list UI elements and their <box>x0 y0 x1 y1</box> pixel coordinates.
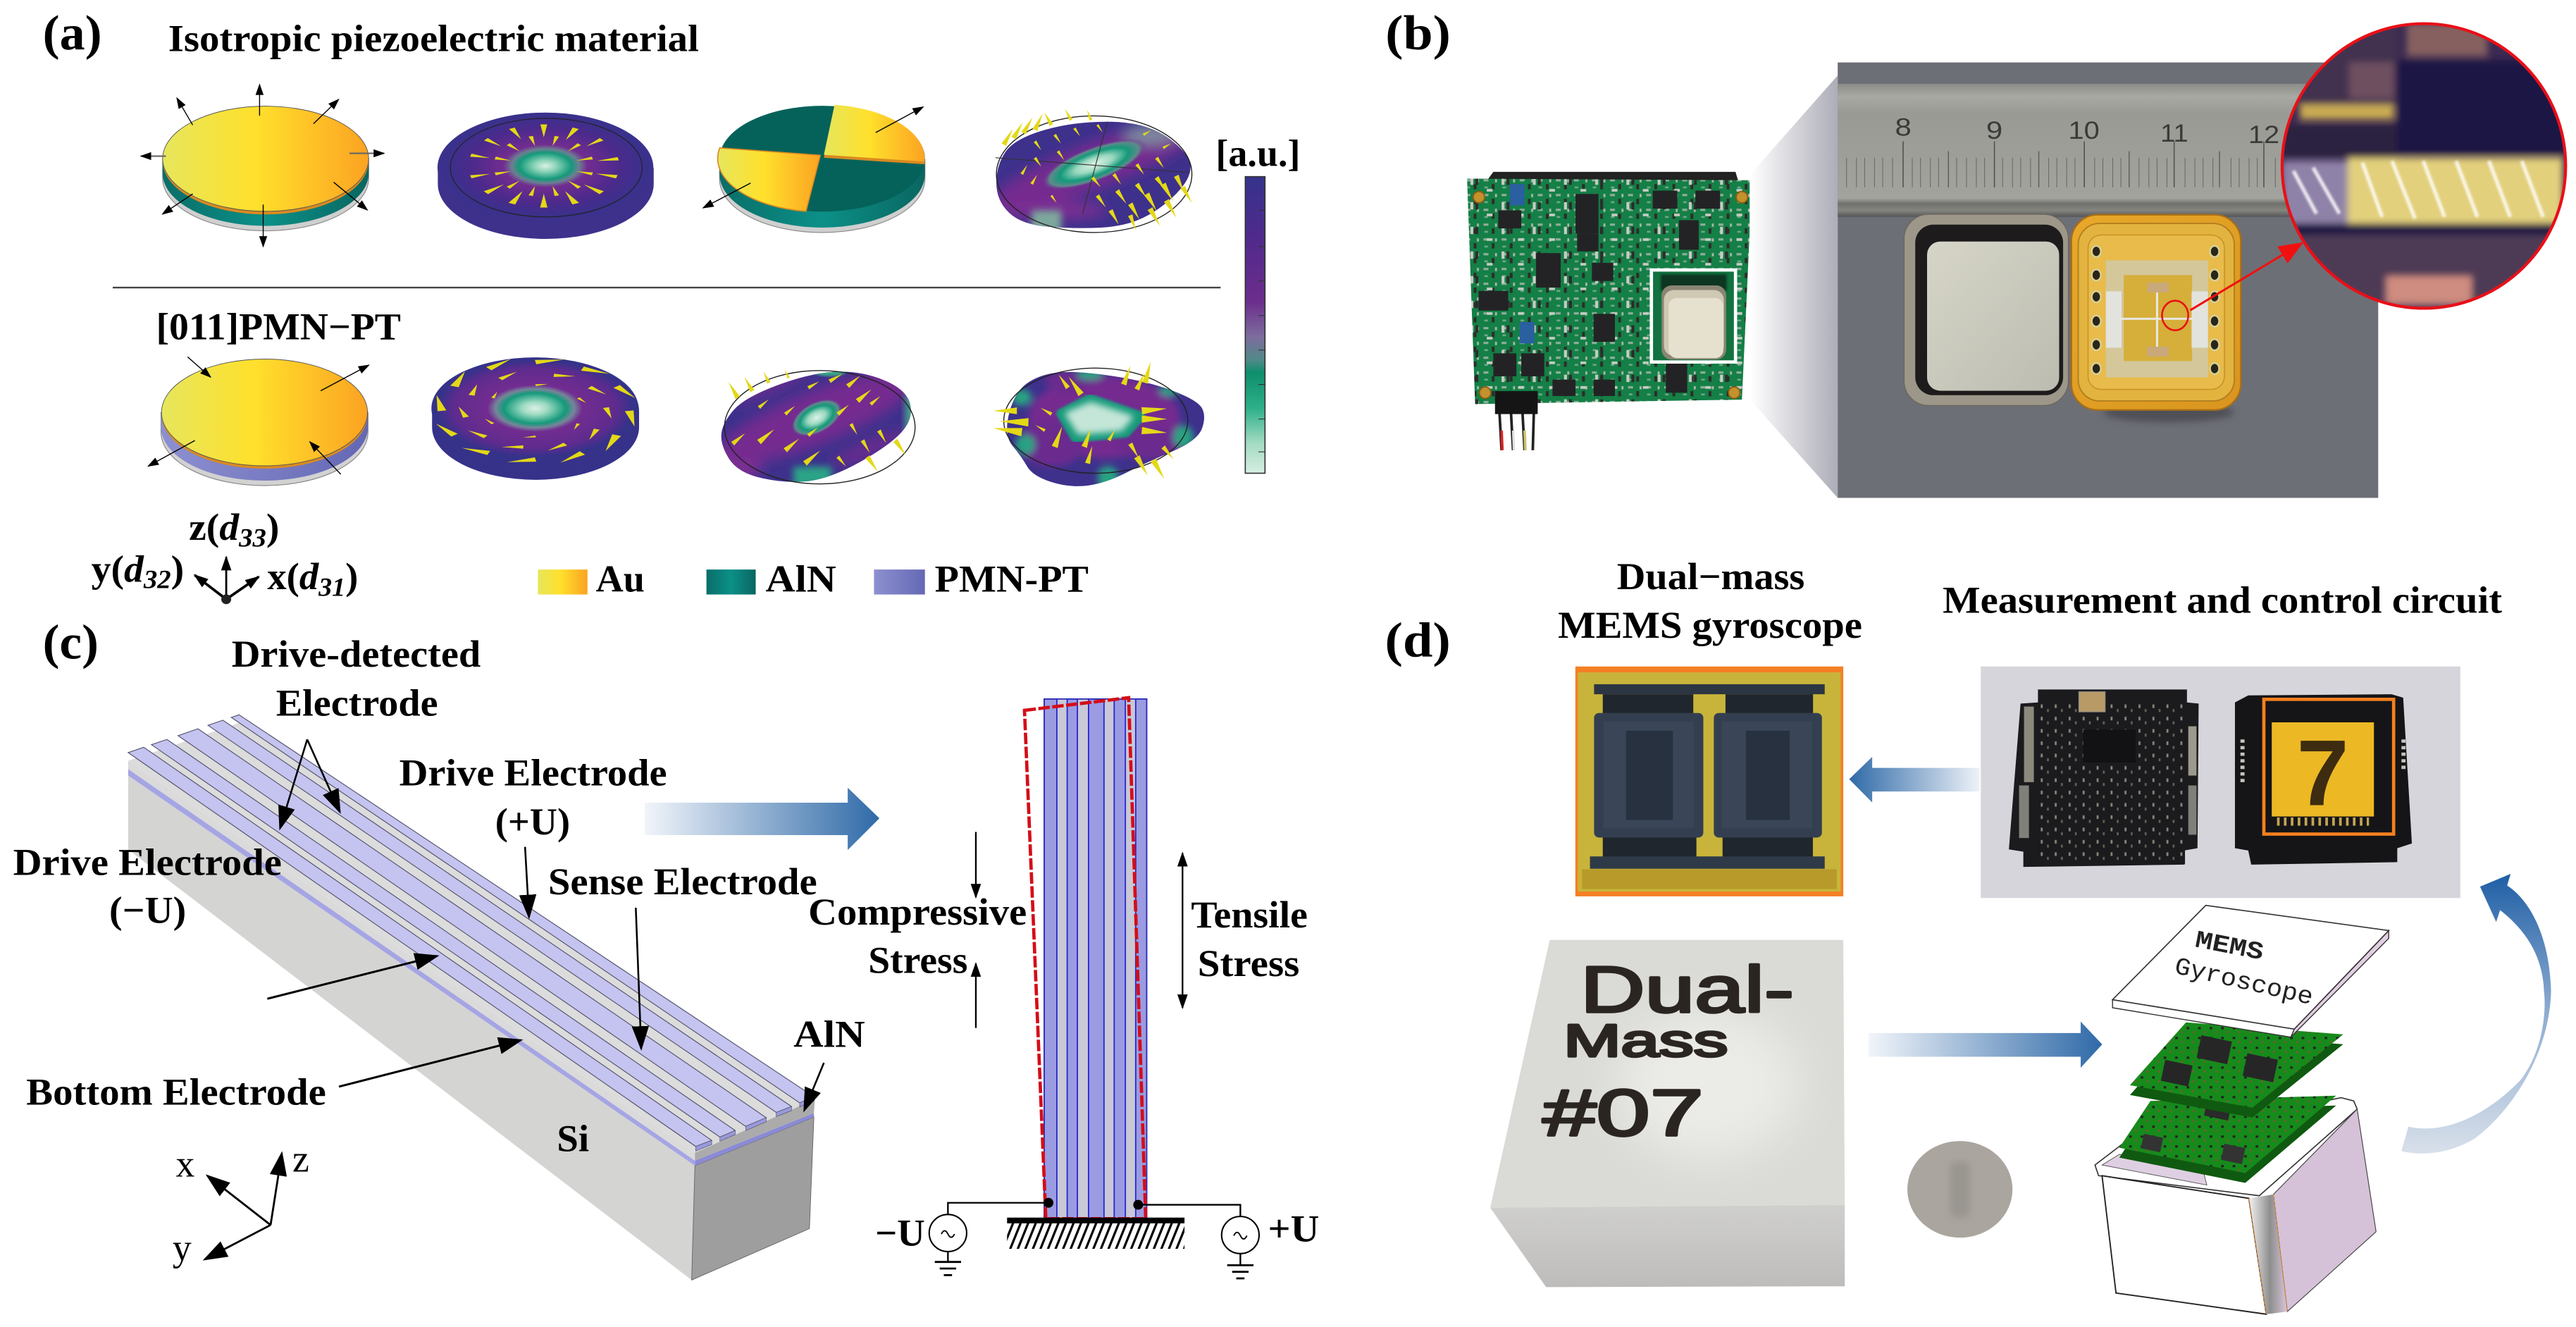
arrow: blue flow right to assembly <box>1869 1022 2103 1068</box>
arrow: blue flow right <box>645 788 879 850</box>
axis triad with d33 d32 d31 labels: ) <box>345 555 358 598</box>
heading: dual-mass gyroscope: MEMS gyroscope <box>1558 604 1862 646</box>
disc 2: breathing mode field <box>438 113 654 239</box>
panel a: piezoelectric vibration modes <box>43 6 1300 604</box>
ruler <box>1838 84 2306 217</box>
axis triad with d33 d32 d31 labels: 31 <box>318 573 345 602</box>
beam: silicon with AlN and electrodes <box>128 715 815 1280</box>
legend: materials: Au <box>596 557 645 600</box>
open lid <box>1904 214 2069 405</box>
compressive stress label and arrows <box>808 832 1027 1028</box>
axis triad with d33 d32 d31 labels: ) <box>266 506 279 548</box>
tensile stress label and arrow <box>1182 853 1308 1008</box>
voltage source +U <box>1133 1200 1319 1278</box>
label: drive-detected electrode: Electrode <box>276 681 438 724</box>
heading: measurement circuit: Measurement and control circuit <box>1943 579 2502 622</box>
label: drive electrode -U <box>13 841 437 999</box>
label: bottom electrode: Bottom Electrode <box>26 1071 326 1113</box>
photo: aluminium block with handwriting: #07 <box>1542 1076 1704 1149</box>
ruler: 8 <box>1895 114 1912 142</box>
label: AlN <box>793 1013 865 1110</box>
label: AlN: AlN <box>793 1013 865 1055</box>
lid with MEMS Gyroscope engraving: MEMS <box>2193 927 2266 968</box>
green circuit board <box>1467 172 1752 450</box>
panel b: packaged gyroscope photos <box>1385 6 2566 498</box>
tensile stress label and arrow: Stress <box>1198 942 1299 985</box>
xyz axes <box>173 1137 309 1269</box>
disc 7: deformed mode field <box>722 369 916 485</box>
magnified wire bonds circle <box>2282 23 2566 309</box>
heading: dual-mass gyroscope: Dual−mass <box>1617 555 1804 598</box>
lower PCB <box>2119 1096 2336 1183</box>
compressive stress label and arrows: Stress <box>868 939 967 981</box>
curved arrow back to circuit <box>2401 874 2551 1154</box>
axis triad with d33 d32 d31 labels: x(d <box>267 555 318 598</box>
voltage source +U: +U <box>1268 1207 1319 1249</box>
xyz axes: x <box>175 1142 194 1185</box>
photo: measurement circuit boards: 7 <box>2297 722 2349 826</box>
ruler: 9 <box>1986 117 2002 144</box>
axis triad with d33 d32 d31 labels: ) <box>171 548 184 590</box>
photo: dual-mass gyroscope die <box>1575 667 1843 896</box>
label: drive electrode -U: Drive Electrode <box>13 841 282 883</box>
bending beam cross section <box>1007 698 1184 1249</box>
photo: aluminium block with handwriting <box>1490 940 1845 1287</box>
label (c): (c) <box>43 615 99 669</box>
panel c: electrode beam and stress diagram <box>13 615 1319 1280</box>
axis triad with d33 d32 d31 labels: z(d <box>189 506 238 548</box>
divider line <box>113 287 1220 288</box>
label (b): (b) <box>1385 6 1451 61</box>
legend: materials: AlN <box>766 557 836 600</box>
disc 5: Au on PMN-PT <box>148 357 369 486</box>
ruler: 11 <box>2160 120 2188 147</box>
disc 1: Au on AlN extension <box>141 85 384 247</box>
axis triad with d33 d32 d31 labels <box>92 506 358 604</box>
xyz axes: y <box>173 1226 192 1269</box>
heading: PMN-PT: [011]PMN−PT <box>156 305 401 347</box>
label: Si: Si <box>557 1117 589 1159</box>
ruler: 12 <box>2248 121 2279 149</box>
disc 8: triangular mode field <box>993 361 1213 493</box>
axis triad with d33 d32 d31 labels: y(d <box>92 548 143 590</box>
label: drive electrode +U: Drive Electrode <box>400 752 667 794</box>
arrow: blue flow left <box>1849 757 1980 803</box>
coin for scale <box>1907 1141 2012 1237</box>
axis triad with d33 d32 d31 labels: 33 <box>238 524 266 553</box>
photo: aluminium block with handwriting: Mass <box>1563 1015 1728 1066</box>
lid with MEMS Gyroscope engraving <box>2112 906 2389 1037</box>
label (a): (a) <box>43 6 102 61</box>
xyz axes: z <box>292 1137 309 1180</box>
label: drive electrode -U: (−U) <box>109 889 186 932</box>
label: sense electrode: Sense Electrode <box>548 860 817 903</box>
lid with MEMS Gyroscope engraving: Gyroscope <box>2172 953 2316 1012</box>
colour scale with unit label: [a.u.] <box>1215 132 1300 175</box>
red marker ellipse and arrow <box>2162 244 2301 331</box>
exploded assembly drawing <box>2095 906 2389 1314</box>
gold package with pads and die <box>2072 215 2241 422</box>
ruler: 10 <box>2069 117 2100 144</box>
compressive stress label and arrows: Compressive <box>808 891 1027 933</box>
heading: dual-mass gyroscope <box>1558 555 1862 646</box>
package photo with ruler <box>1838 63 2378 498</box>
disc 4: shear mode field <box>995 109 1192 233</box>
housing box <box>2095 1098 2376 1314</box>
voltage source -U: −U <box>875 1211 925 1254</box>
legend: materials: PMN-PT <box>935 557 1089 600</box>
label: drive electrode +U: (+U) <box>495 801 570 843</box>
label: drive-detected electrode <box>232 633 481 828</box>
disc 6: swirling torsion field <box>431 357 639 480</box>
disc 3: quadrant electrode <box>703 105 925 233</box>
legend: materials <box>538 557 1089 600</box>
photo: measurement circuit boards <box>1981 667 2460 898</box>
label: sense electrode <box>548 860 817 1049</box>
voltage source -U <box>875 1198 1053 1275</box>
axis triad with d33 d32 d31 labels: 32 <box>143 566 171 595</box>
colour scale with unit label <box>1215 132 1300 474</box>
panel d: gyroscope assembly <box>1385 555 2551 1314</box>
photo: aluminium block with handwriting: Dual- <box>1580 953 1794 1026</box>
label: bottom electrode <box>26 1040 521 1113</box>
label: drive-detected electrode: Drive-detected <box>232 633 481 675</box>
label (d): (d) <box>1385 613 1451 667</box>
label: drive electrode +U <box>400 752 667 917</box>
heading: isotropic material: Isotropic piezoelectric material <box>168 17 699 59</box>
tensile stress label and arrow: Tensile <box>1191 894 1308 936</box>
zoom fan <box>1750 75 1838 498</box>
upper PCB <box>2130 1023 2343 1118</box>
